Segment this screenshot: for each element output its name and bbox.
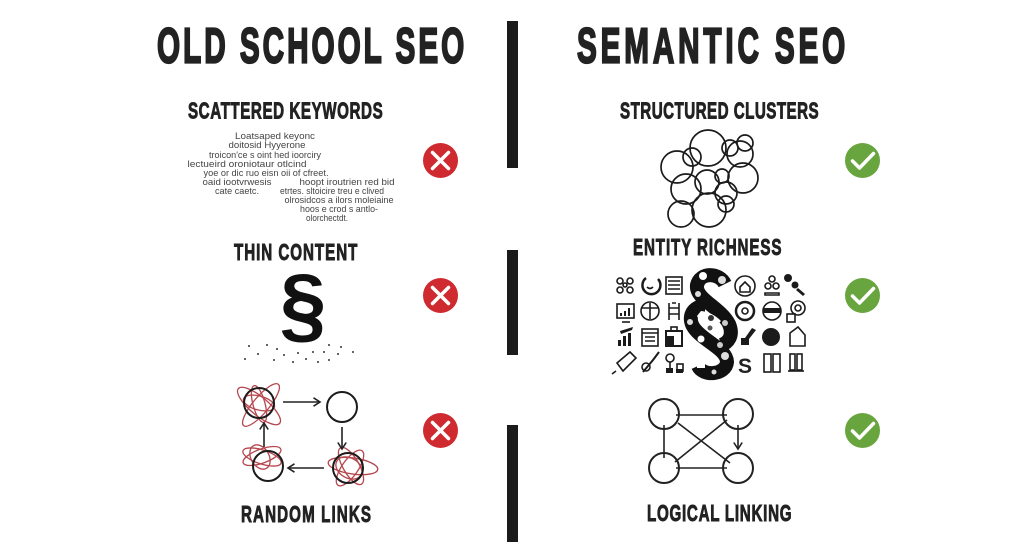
link nodes [244,388,363,483]
text block: scattered keywords: olrosidcos a ilors moleiaine [284,195,394,206]
scribbles [233,379,379,490]
small icons [612,276,805,374]
title: semantic seo: SEMANTIC SEO [577,18,845,73]
heading: structured clusters: STRUCTURED CLUSTERS [620,98,819,124]
text block: scattered keywords: hoopt iroutrien red bid [300,177,394,188]
icon: section sign with dots [244,257,354,363]
icon: red cross 1 [423,143,458,178]
text block: scattered keywords: yoe or dic ruo eisn oii of cfreet. [204,168,328,179]
diagram: random links [233,379,379,490]
text block: scattered keywords: doitosid Hyyerone [228,140,306,151]
icon: section sign with dots: § [280,257,326,351]
icon: green check 3 [845,413,880,448]
icon: red cross 2 [423,278,458,313]
text block: scattered keywords: Loatsaped keyonc [235,131,315,142]
text block: scattered keywords: olorchectdt. [306,213,348,224]
text block: scattered keywords: troicon'ce s oint hed ioorciry [209,150,321,161]
text block: scattered keywords: hoos e crod s antlo- [300,204,378,215]
icon cluster: entity symbols [612,272,805,378]
title: old school seo: OLD SCHOOL SEO [157,18,464,73]
text block: scattered keywords: lectueird oroniotaur otlcind [188,159,306,170]
divider: center column [507,21,518,542]
diagram: overlapping clusters [661,130,758,227]
heading: random links: RANDOM LINKS [241,502,371,528]
small section glyph: S [738,355,752,378]
big section symbol [687,272,731,374]
diagram: logical linking [649,399,753,483]
heading: thin content: THIN CONTENT [234,240,357,266]
text block: scattered keywords: etrtes. sltoicire treu e clived [280,186,384,197]
icon: red cross 3 [423,413,458,448]
text block: scattered keywords [188,131,394,224]
text block: scattered keywords: oaid iootvrwesis [202,177,272,188]
heading: entity richness: ENTITY RICHNESS [633,235,782,261]
text block: scattered keywords: cate caetc. [215,186,259,197]
icon: green check 2 [845,278,880,313]
heading: logical linking: LOGICAL LINKING [647,501,792,527]
icon: green check 1 [845,143,880,178]
heading: scattered keywords: SCATTERED KEYWORDS [188,98,383,124]
link arrows [264,402,342,468]
